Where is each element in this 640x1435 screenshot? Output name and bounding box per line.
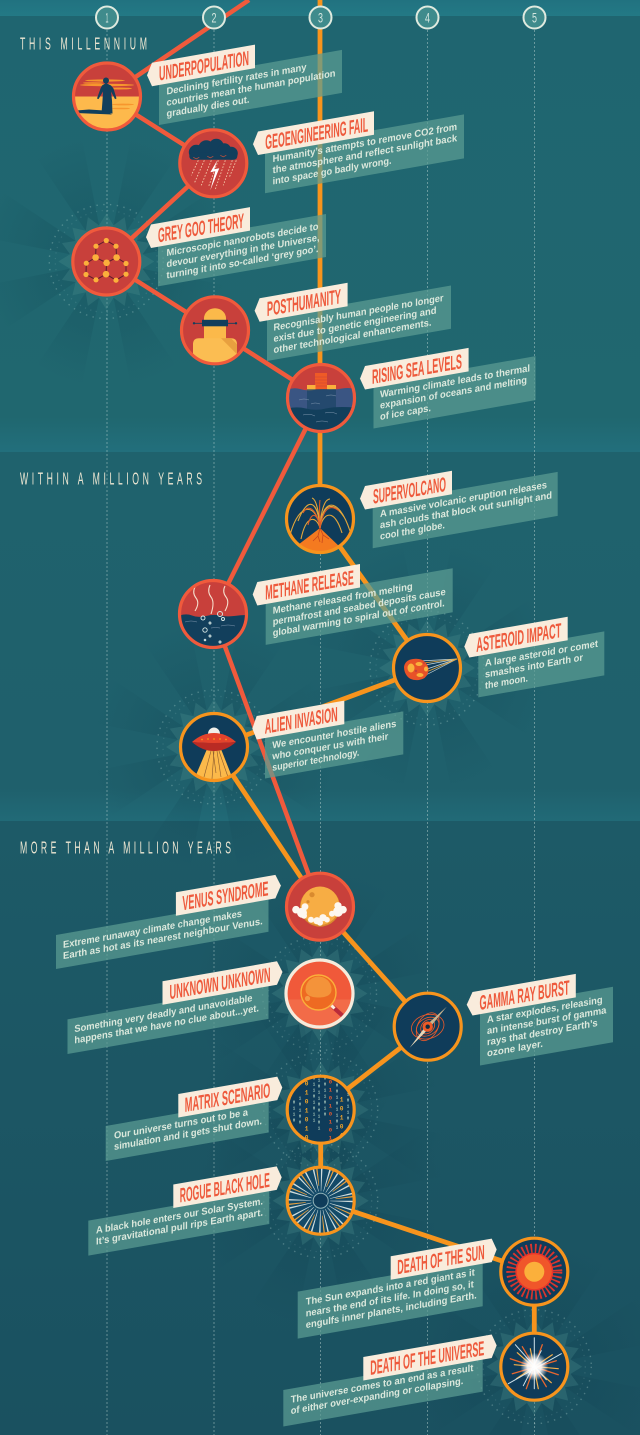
icon: venus [286, 873, 354, 940]
description: devour everything in the Universe, [166, 233, 320, 270]
description: turning it into so-called ‘grey goo’. [166, 244, 319, 281]
icon: supervolcano [285, 484, 355, 559]
description: into space go badly wrong. [273, 156, 392, 188]
description: A large asteroid or comet [485, 639, 599, 669]
title tag [176, 874, 281, 916]
description: The Sun expands into a red giant as it [306, 1267, 475, 1308]
title tag [173, 1166, 282, 1209]
description [374, 356, 536, 429]
description [373, 472, 558, 548]
callout: asteroid impact [464, 610, 604, 700]
description [478, 631, 604, 697]
heading: this millennium: THIS MILLENNIUM [20, 34, 147, 53]
red path [106, 0, 321, 907]
callout: posthumanity [255, 265, 451, 363]
description: Humanity’s attempts to remove CO2 from [273, 122, 457, 165]
description: simulation and it gets shut down. [114, 1116, 262, 1153]
title tag [252, 701, 344, 741]
title tag [255, 283, 348, 323]
description: who conquer us with their [271, 731, 388, 763]
description: cool the globe. [380, 520, 445, 543]
description: an intense burst of gamma [487, 1005, 607, 1037]
description [266, 568, 453, 645]
icon: grey goo molecule [73, 228, 140, 295]
numbered column markers [96, 6, 546, 28]
title tag [146, 207, 250, 250]
description: the moon. [485, 673, 528, 692]
description: Warming climate leads to thermal [380, 363, 530, 401]
title tag: UNKNOWN UNKNOWN [169, 964, 270, 1004]
description: engulfs inner planets, including Earth. [306, 1290, 477, 1331]
description: A black hole enters our Solar System. [96, 1196, 263, 1237]
icon: matrix code: 10101 [340, 1097, 344, 1140]
icon: matrix code [286, 1075, 356, 1145]
description: ozone layer. [487, 1039, 543, 1060]
callout: alien invasion: ALIEN INVASION [265, 703, 338, 739]
description: happens that we have no clue about...yet. [74, 1003, 259, 1047]
icon: matrix code: 0110 [293, 1102, 296, 1124]
icon: unknown magnifying glass [286, 960, 353, 1029]
description: smashes into Earth or [485, 653, 583, 681]
description: A massive volcanic eruption releases [380, 480, 547, 520]
description: We encounter hostile aliens [272, 719, 397, 751]
icon: matrix code: 101100101 [318, 1080, 321, 1132]
description: superior technology. [272, 748, 359, 774]
icon: matrix code: 0101010 [305, 1081, 309, 1142]
description [159, 50, 342, 125]
description: expansion of oceans and melting [380, 375, 527, 412]
description: ash clouds that block out sunlight and [380, 490, 552, 531]
title tag [360, 348, 469, 391]
title tag [178, 1076, 282, 1118]
numbered column markers: 3 [318, 10, 323, 26]
callout: methane release [253, 548, 453, 647]
icon: gamma ray burst [394, 993, 461, 1060]
title tag: DEATH OF THE SUN [397, 1241, 485, 1279]
callout: geoengineering fail [253, 95, 464, 195]
description: countries mean the human population [166, 68, 336, 109]
title tag [147, 45, 255, 88]
callout: death of the universe [283, 1334, 497, 1427]
description [265, 114, 464, 193]
description: permafrost and seabed deposits cause [273, 587, 446, 628]
text: DEATH OF THE UNIVERSE [370, 1337, 484, 1380]
text: ROGUE BLACK HOLE [180, 1169, 270, 1208]
icon: matrix code: 0011010 [324, 1078, 327, 1118]
icon: methane release [178, 579, 248, 649]
icon: posthumanity figure [180, 295, 250, 366]
numbered column markers: 2 [212, 10, 217, 26]
heading: more than a million years: MORE THAN A MILLION YEARS [20, 838, 231, 857]
description [298, 1259, 483, 1339]
description [283, 1355, 483, 1427]
icon: matrix code: 100101101 [336, 1079, 339, 1131]
description: A star explodes, releasing [487, 995, 603, 1026]
description: other technological enhancements. [274, 318, 432, 356]
description [265, 711, 403, 779]
icon: universe explosion [501, 1333, 568, 1400]
numbered column markers: 1 [106, 10, 109, 26]
callout: gamma ray burst [467, 967, 613, 1068]
description: Earth as hot as its nearest neighbour Venus. [63, 916, 263, 962]
description: Extreme runaway climate change makes [63, 909, 242, 951]
description: Our universe turns out to be a [114, 1107, 248, 1142]
numbered column markers: 4 [425, 10, 430, 26]
icon: geoengineering storm [178, 128, 248, 198]
title tag [162, 960, 282, 1005]
description: gradually dies out. [166, 95, 250, 120]
callout: underpopulation [147, 29, 342, 127]
icon: asteroid [392, 633, 462, 703]
icon: matrix code: 01101011 [313, 1078, 316, 1124]
callout: grey goo theory: GREY GOO THEORY [158, 210, 244, 247]
callout: geoengineering fail: GEOENGINEERING FAIL [265, 114, 368, 154]
description: exist due to genetic engineering and [274, 305, 437, 345]
callout: unknown unknown [68, 960, 282, 1054]
description [480, 987, 613, 1065]
description: Declining fertility rates in many [166, 62, 307, 98]
icon: matrix code: 10100 [299, 1098, 302, 1126]
timeline paths [106, 0, 534, 1367]
description: of ice caps. [380, 403, 431, 423]
description [267, 285, 451, 361]
callout: rising sea levels [360, 336, 536, 431]
description: global warming to spiral out of control. [273, 598, 445, 639]
icon: alien ufo [179, 712, 249, 782]
callout: death of the sun [298, 1238, 497, 1339]
heading: within a million years: WITHIN A MILLION YEARS [20, 469, 202, 488]
callout: venus syndrome [56, 874, 281, 969]
title tag [391, 1238, 497, 1280]
icon: matrix code: 10110 [347, 1094, 350, 1122]
title tag: MATRIX SCENARIO [185, 1079, 270, 1117]
callout: supervolcano: SUPERVOLCANO [373, 473, 446, 509]
callout: alien invasion [252, 690, 403, 781]
icon: dying sun [501, 1238, 568, 1305]
icon: rogue black hole [286, 1166, 356, 1236]
description [88, 1189, 269, 1256]
callout: grey goo theory [146, 194, 326, 288]
icon: rising sea levels [286, 363, 356, 433]
title tag [363, 1334, 497, 1381]
icon: matrix code: 01010101 [329, 1079, 333, 1142]
numbered column markers: 5 [532, 10, 537, 26]
callout: underpopulation: UNDERPOPULATION [159, 47, 249, 86]
title tag: VENUS SYNDROME [182, 877, 268, 915]
orange path [214, 0, 534, 1367]
callout: matrix scenario [106, 1076, 282, 1161]
description [106, 1097, 269, 1161]
description: Something very deadly and unavoidable [74, 993, 253, 1035]
description: the atmosphere and reflect sunlight back [273, 133, 458, 176]
description: Microscopic nanorobots decide to [166, 222, 318, 259]
description: Recognisably human people no longer [274, 293, 444, 334]
description [56, 898, 268, 969]
description: rays that destroy Earth’s [487, 1018, 598, 1048]
callout: posthumanity: POSTHUMANITY [267, 285, 341, 321]
callout: supervolcano [360, 452, 558, 550]
description [68, 984, 268, 1054]
callout: rogue black hole [88, 1166, 282, 1256]
description: of either over-expanding or collapsing. [291, 1376, 464, 1417]
title tag [253, 111, 374, 157]
icon: underpopulation [72, 62, 142, 132]
title tag [467, 974, 576, 1017]
description: nears the end of its life. In doing so, it [306, 1279, 474, 1320]
title tag [360, 471, 452, 511]
callout: methane release: METHANE RELEASE [265, 566, 354, 605]
description: Methane released from melting [273, 581, 413, 617]
description: The universe comes to an end as a result [291, 1363, 474, 1406]
title tag [253, 564, 360, 607]
description: It’s gravitational pull rips Earth apart. [96, 1208, 263, 1248]
callout: rising sea levels: RISING SEA LEVELS [372, 350, 462, 389]
description [158, 214, 326, 286]
